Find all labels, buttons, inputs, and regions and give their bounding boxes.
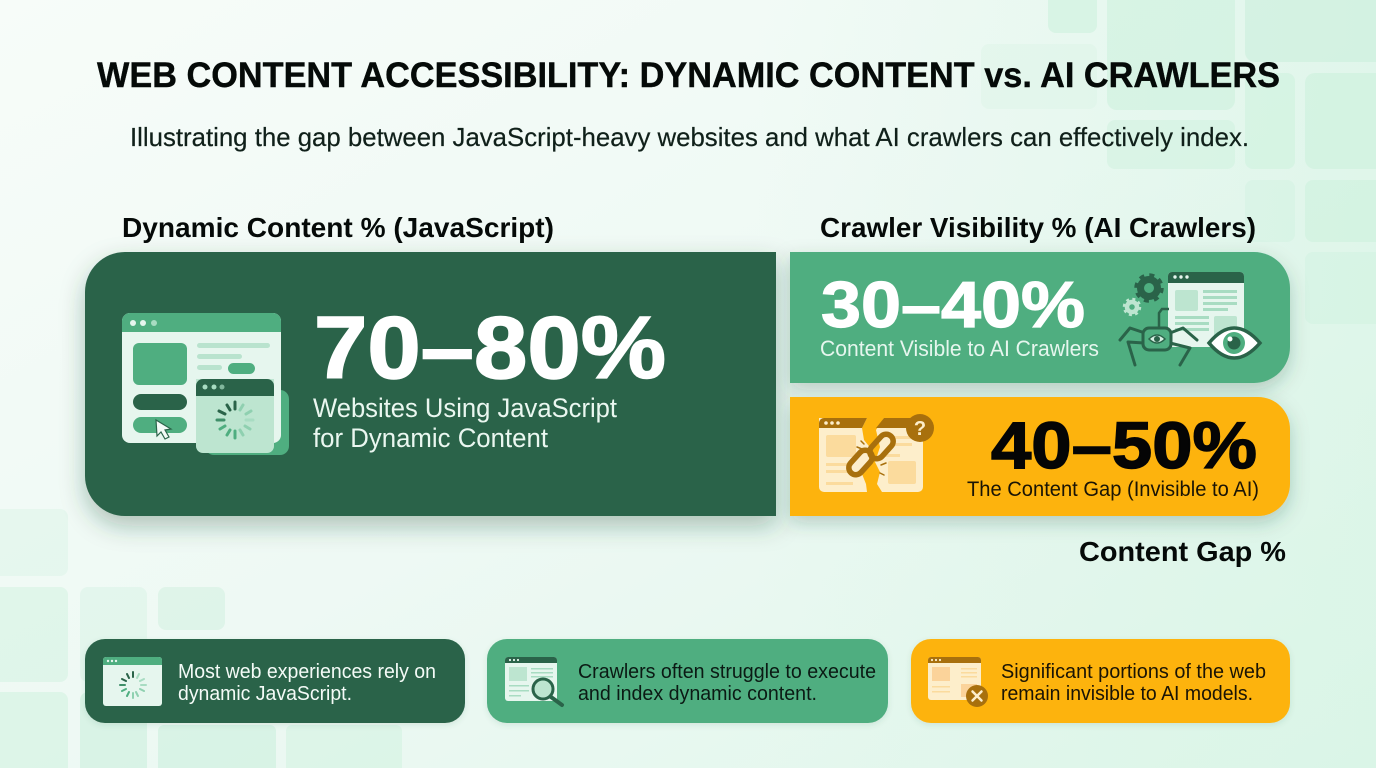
stat: 70-80%: 70–80% <box>314 298 666 397</box>
card text: Most web experiences rely on <box>178 661 436 683</box>
caption: for dynamic content: for Dynamic Content <box>313 423 548 453</box>
panel: content gap <box>790 397 1290 516</box>
card: dynamic JavaScript <box>85 639 465 723</box>
icon: page with magnifier <box>505 657 562 705</box>
card text: Crawlers often struggle to execute <box>578 661 876 683</box>
icon: spider, gears, page and eye <box>1120 272 1260 365</box>
card text: Significant portions of the web <box>1001 661 1266 683</box>
icon: broken page with chain link: ? <box>914 418 926 440</box>
icon: browser with loading popup <box>122 313 289 455</box>
icon: page with x badge <box>928 657 988 707</box>
stat: 40-50%: 40–50% <box>991 408 1257 482</box>
heading: dynamic content: Dynamic Content % (JavaScript) <box>122 212 554 243</box>
icon: loading window <box>103 657 162 706</box>
card text: and index dynamic content. <box>578 683 817 705</box>
card text: dynamic JavaScript. <box>178 683 352 705</box>
heading: crawler visibility: Crawler Visibility % (AI Crawlers) <box>820 212 1256 243</box>
panel: crawler visibility <box>790 252 1290 383</box>
card text: remain invisible to AI models. <box>1001 683 1253 705</box>
caption: content gap: The Content Gap (Invisible to AI) <box>967 478 1259 501</box>
title: WEB CONTENT ACCESSIBILITY: DYNAMIC CONTENT vs. AI CRAWLERS <box>97 56 1280 95</box>
stat: 30-40%: 30–40% <box>821 268 1085 341</box>
panel: dynamic content <box>85 252 776 516</box>
caption: content visible: Content Visible to AI Crawlers <box>820 336 1099 361</box>
card: crawlers struggle <box>487 639 888 723</box>
subtitle: Illustrating the gap between JavaScript-heavy websites and what AI crawlers can effectively index. <box>130 122 1249 152</box>
card: invisible web <box>911 639 1290 723</box>
caption: websites using JavaScript: Websites Using JavaScript <box>313 393 617 423</box>
heading: content gap: Content Gap % <box>1079 536 1286 567</box>
icon: broken page with chain link <box>819 414 934 492</box>
